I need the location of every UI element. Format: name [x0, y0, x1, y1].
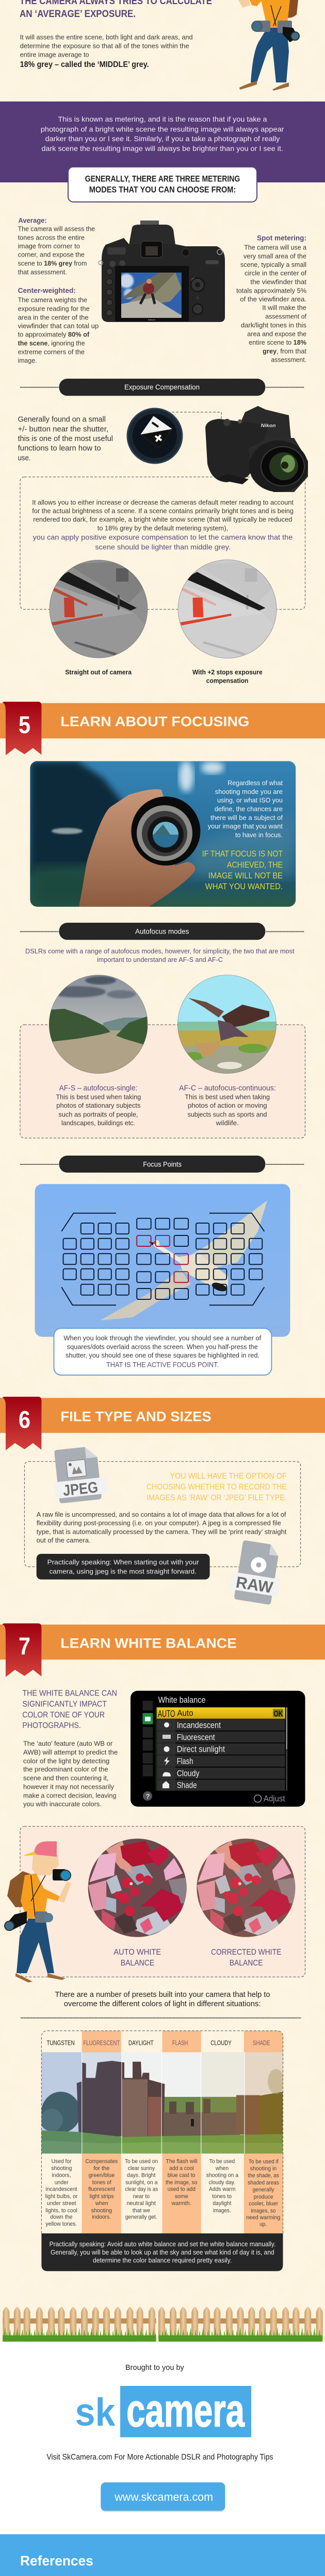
text: center-weighted metering: the scene, ignoring the [18, 340, 85, 347]
text: average metering: that assessment. [18, 268, 67, 276]
menu row: Auto [157, 1707, 285, 1719]
callout: practically speaking white balance: determine the color balance required pretty easily. [93, 2257, 232, 2264]
column: shade: need warming [246, 2214, 280, 2221]
section banner 6 [0, 1397, 325, 1450]
section banner 6: FILE TYPE AND SIZES [60, 1409, 212, 1424]
section banner 7 [0, 1623, 325, 1677]
callout: practically speaking white balance [41, 2233, 283, 2271]
text: presets intro: overcome the different colors of light in different situations: [64, 1999, 261, 2008]
text: spot metering: of the viewfinder area. [240, 295, 306, 303]
section pill: Exposure Compensation: Exposure Compensation [124, 383, 200, 391]
text: spot metering: assessment. [271, 356, 306, 364]
section pill: Autofocus modes: Autofocus modes [135, 927, 189, 935]
panel: metering band: dark scene the resulting image will always be brighter than you or I see it. [41, 144, 283, 152]
column: flash: The flash will [166, 2158, 197, 2164]
column: shade: To be used if [249, 2159, 279, 2165]
section pill: Autofocus modes [20, 923, 304, 940]
column: tungsten: Used for [52, 2158, 72, 2164]
column: cloudy: images. [213, 2208, 231, 2214]
text: auto white balance: make a correct decision, leaving [23, 1791, 116, 1799]
text: where the button is: functions to learn how to [18, 444, 101, 452]
column: tungsten: yellow tones. [45, 2221, 77, 2227]
column: shade: shooting in [250, 2166, 277, 2172]
text: autofocus intro [25, 947, 295, 963]
text: brought to you by: Brought to you by [125, 2364, 185, 2372]
text: spot metering [236, 234, 307, 364]
column: shade: up. [259, 2222, 267, 2228]
column: daylight: generally get. [125, 2214, 157, 2221]
panel: exposure compensation explanation: rendered too dark, for example, a bright white snow scene (that will typically be reduced [33, 516, 293, 523]
column: fluorescent: fluorescent [88, 2187, 115, 2193]
text: autofocus intro: important to understand are AF-S and AF-C [97, 956, 223, 963]
text: AF-S: This is best used when taking [56, 1093, 141, 1100]
panel: file types: CHOOSING WHETHER TO RECORD THE [147, 1483, 287, 1492]
image: camera back [99, 221, 225, 322]
column: tungsten: under street [47, 2200, 76, 2207]
column: flash: some [175, 2194, 188, 2200]
text: auto white balance: The ‘auto’ feature (auto WB or [23, 1740, 113, 1748]
menu rows: presets: Cloudy [177, 1768, 200, 1778]
image: camera back: Nikon [148, 318, 155, 321]
text: where the button is: this is one of the most useful [18, 434, 113, 443]
image: swan [100, 1200, 267, 1320]
table headers: FLUORESCENT [84, 2039, 120, 2046]
column: tungsten: under [55, 2179, 69, 2185]
text: center-weighted metering: viewfinder that can total up [18, 322, 99, 330]
text: center-weighted metering: image. [18, 357, 37, 364]
panel: metering band [0, 101, 325, 182]
text: center-weighted metering: Center-weighted: [18, 286, 76, 295]
captions for exposure photos [65, 668, 263, 685]
column: flash: blue cast to [168, 2172, 195, 2178]
text: spot metering: The camera will use a [244, 243, 307, 251]
image: photo straight out of camera [49, 560, 148, 659]
column: daylight: days. Bright [127, 2172, 155, 2178]
menu rows: presets: Flash [177, 1756, 193, 1766]
callout: practically speaking jpeg: Practically speaking: When starting out with your [47, 1558, 199, 1566]
panel: focusing photo with lens: using, or what ISO you [217, 796, 283, 804]
panel: focus points on swan photo [35, 1184, 290, 1375]
intro heading: AN ‘AVERAGE’ EXPOSURE. [20, 9, 136, 20]
section pill: Focus Points [20, 1156, 304, 1173]
table headers: DAYLIGHT [128, 2039, 154, 2046]
column: cloudy: Adds warm [209, 2187, 235, 2193]
column: flash: warmth. [171, 2200, 191, 2207]
panel: focusing photo with lens: define, the chances are [215, 805, 283, 812]
text: where the button is: Generally found on a small [18, 415, 106, 423]
image: camera white balance menu: Adjust [264, 1794, 285, 1804]
text: spot metering: very small area of the [243, 252, 306, 260]
column: tungsten: shooting [51, 2165, 72, 2172]
text: auto white balance: scene and then countering it, [23, 1774, 108, 1782]
column: daylight: clear sunny [128, 2165, 155, 2172]
panel: file types: out of the camera. [37, 1536, 91, 1544]
menu rows: presets: Shade [177, 1781, 197, 1790]
captions for exposure photos: compensation [206, 677, 248, 685]
column: fluorescent: when [95, 2200, 108, 2207]
text: AF-C: AF-C – autofocus-continuous: [179, 1084, 276, 1093]
panel: white balance presets table [40, 2031, 284, 2271]
menu sidebar icons [142, 1701, 153, 1801]
text: visit site: Visit SkCamera.com For More Actionable DSLR and Photography Tips [46, 2453, 273, 2462]
image: camera front: Nikon [261, 423, 276, 428]
image: corrected white balance leaves [197, 1838, 296, 1937]
column: flash: add a cool [169, 2165, 194, 2172]
column: shade: the shade, as [248, 2173, 279, 2179]
callout: practically speaking jpeg [37, 1554, 210, 1580]
table column backgrounds [82, 2031, 283, 2233]
menu row: Auto: AUTO [158, 1709, 175, 1719]
column: daylight: To be used on [125, 2158, 158, 2164]
column: cloudy: daylight [213, 2200, 231, 2207]
intro heading [20, 0, 212, 20]
text: spot metering: entire scene to 18% [249, 338, 306, 346]
menu row: Auto: Auto [177, 1708, 193, 1718]
text: spot metering: It will make the [262, 304, 306, 312]
column: daylight: sunlight, on a [125, 2179, 158, 2185]
intro text: entire image average to [20, 50, 89, 58]
panel: focusing photo with lens: IMAGE WILL NOT BE [208, 871, 283, 880]
captions: BALANCE [121, 1959, 154, 1968]
text: average metering: image from corner to [18, 242, 80, 250]
text: average metering: Average: [18, 216, 47, 225]
panel: focusing photo with lens: ACHIEVED, THE [227, 860, 283, 870]
column: cloudy: To be used [209, 2158, 235, 2164]
callout: active focus point: THAT IS THE ACTIVE FOCUS POINT. [106, 1360, 219, 1368]
column: fluorescent: indoors. [92, 2214, 111, 2221]
illustration: picket fence and grass [3, 2307, 323, 2342]
column: cloudy: cloudy day. [209, 2179, 235, 2185]
heading: white balance impact: SIGNIFICANTLY IMPACT [22, 1700, 107, 1709]
text: auto white balance: AWB) will attempt to predict the [23, 1748, 118, 1756]
text: where the button is [18, 415, 113, 462]
text: spot metering: Spot metering: [257, 234, 306, 242]
text: spot metering: grey, from that [263, 347, 306, 355]
panel: exposure compensation explanation: scene should be lighter than middle grey. [95, 543, 231, 551]
panel: focusing photo with lens: your image that you want [208, 822, 283, 830]
image: castle with colour tints [40, 2052, 284, 2154]
text: auto white balance [23, 1740, 118, 1808]
text: spot metering: circle in the center of [245, 269, 306, 277]
intro text [20, 33, 193, 69]
panel: metering band: photograph of a bright white scene the resulting image will always appear [41, 125, 284, 133]
text: spot metering: the viewfinder that [250, 278, 306, 285]
text: center-weighted metering: area in the center of the [18, 313, 89, 321]
column: fluorescent [86, 2158, 118, 2221]
text: auto white balance: you with inaccurate colors. [23, 1800, 102, 1808]
text: AF-S [56, 1084, 141, 1127]
text: auto white balance: however it may not necessarily [23, 1783, 114, 1791]
panel: metering band: darker than you or I see it. Similarly, if you a take a photograph of really [45, 134, 280, 143]
image: eagle and deer for AF-C [177, 975, 277, 1075]
text: where the button is: +/- button near the shutter, [18, 425, 108, 433]
text: spot metering: assessment of [265, 313, 306, 320]
button: website [101, 2482, 225, 2512]
menu rows: presets: Direct sunlight [177, 1744, 225, 1754]
column: fluorescent: tones of [92, 2179, 112, 2185]
text: spot metering: dark/light tones in this [241, 321, 307, 329]
panel: file types [24, 1462, 301, 1567]
text: spot metering: area and expose the [247, 330, 306, 337]
text: autofocus intro: DSLRs come with a range of autofocus modes, however, for simplicity, the two that are most [25, 947, 295, 955]
text: average metering [18, 216, 95, 276]
section banner 7: 7 [19, 1633, 30, 1660]
captions for exposure photos: Straight out of camera [65, 668, 132, 676]
captions [113, 1948, 281, 1968]
column: tungsten: indoors, [52, 2172, 71, 2178]
table headers: SHADE [253, 2039, 270, 2046]
image: camera white balance menu: White balance [158, 1695, 206, 1705]
callout: practically speaking white balance: Generally, you will be able to look up at the sky and see what kind of day it is, and [51, 2248, 274, 2256]
text: AF-S: AF-S – autofocus-single: [59, 1084, 137, 1093]
column: flash [166, 2158, 197, 2207]
text: center-weighted metering [18, 286, 99, 364]
panel: focusing photo with lens: shooting mode you are [215, 788, 283, 795]
text: AF-C: wildlife. [216, 1119, 239, 1127]
callout: active focus point: When you look through the viewfinder, you should see a number of [63, 1334, 262, 1342]
text: center-weighted metering: exposure reading for the [18, 304, 90, 312]
panel: exposure compensation explanation: to 18% grey by the default metering system), [98, 524, 228, 532]
text: center-weighted metering: extreme corners of the [18, 348, 85, 355]
callout: three metering modes: GENERALLY, THERE ARE THREE METERING [85, 174, 240, 183]
callout: three metering modes [68, 167, 257, 202]
column: tungsten: light bulbs, or [45, 2194, 78, 2200]
column: cloudy [206, 2158, 239, 2214]
icon: photographer with pink cap [5, 1841, 71, 1982]
icon: photographer top [238, 0, 299, 91]
text: AF-S: photos of stationary subjects [56, 1101, 141, 1109]
menu row: Auto: OK [273, 1709, 283, 1719]
icon: exposure compensation button [127, 409, 221, 463]
text: average metering: corner, and expose the [18, 251, 85, 259]
menu rows: presets [157, 1719, 285, 1791]
column: daylight: neutral light [127, 2200, 156, 2207]
heading: white balance impact: THE WHITE BALANCE CAN [22, 1689, 117, 1698]
panel: focusing photo with lens: IF THAT FOCUS IS NOT [202, 849, 283, 859]
button: website: www.skcamera.com [114, 2490, 213, 2503]
logo: sk camera: camera [126, 2385, 245, 2436]
panel: file types: type, that is automatically processed by the camera. They will be ‘print ready’ straight [37, 1528, 287, 1535]
column: fluorescent: for the [93, 2165, 109, 2172]
text: presets intro [55, 1990, 270, 2008]
callout: active focus point: shutter, you should see one of these squares be highlighted in red. [66, 1351, 259, 1359]
column: flash: the image, so [166, 2179, 197, 2185]
panel: focusing photo with lens: there will be a subject of [210, 814, 283, 821]
callout: active focus point: squares/dots overlaid across the screen. When you half-press the [67, 1343, 258, 1350]
callout: active focus point [54, 1328, 271, 1375]
column: daylight: that we [133, 2208, 150, 2214]
panel: references [0, 2534, 325, 2576]
text: auto white balance: the predominant color of the [23, 1766, 108, 1773]
icon: RAW file [228, 1539, 285, 1606]
panel: metering band: This is known as metering, and it is the reason that if you take a [58, 115, 267, 123]
column: shade: cooler, bluer [249, 2201, 279, 2207]
column: shade: produce [254, 2194, 273, 2200]
image: auto white balance leaves [88, 1838, 187, 1937]
text: auto white balance: color of the light by detecting [23, 1757, 109, 1765]
panel: autofocus modes [20, 975, 305, 1138]
column: cloudy: when [215, 2165, 229, 2172]
menu sidebar icons: ? [145, 1792, 150, 1800]
heading: white balance impact: COLOR TONE OF YOUR [22, 1710, 105, 1719]
section banner 7: LEARN WHITE BALANCE [60, 1635, 237, 1651]
table headers: CLOUDY [210, 2039, 232, 2046]
text: AF-S: such as portraits of people, [58, 1110, 138, 1118]
menu rows: presets: Fluorescent [177, 1732, 215, 1742]
column: daylight: near to [133, 2194, 150, 2200]
captions for exposure photos: With +2 stops exposure [192, 668, 263, 676]
column: cloudy: tones to [212, 2194, 232, 2200]
intro text: 18% grey – called the ‘MIDDLE’ grey. [20, 60, 149, 69]
text: center-weighted metering: to approximately 80% of [18, 331, 90, 338]
text: average metering: tones across the entire [18, 233, 85, 241]
text: AF-C [179, 1084, 276, 1127]
column: tungsten [45, 2158, 78, 2227]
text: spot metering: totals approximately 5% [236, 286, 306, 294]
image: landscape for AF-S [49, 975, 148, 1074]
section banner 5 [0, 702, 325, 755]
panel: file types: IMAGES AS ‘RAW’ OR ‘JPEG’ FILE TYPE. [147, 1494, 287, 1502]
text: spot metering: scene, typically a small [240, 261, 306, 268]
column: fluorescent: green/blue [89, 2172, 115, 2178]
text: presets intro: There are a number of presets built into your camera that help to [55, 1990, 270, 1999]
focus point grid [61, 1213, 264, 1305]
column: shade: shaded areas [248, 2180, 279, 2186]
image: photo with +2 stops [177, 560, 278, 659]
column: fluorescent: light strips [90, 2194, 114, 2200]
logo: sk camera [75, 2385, 251, 2437]
column: fluorescent: Compensates [86, 2158, 118, 2164]
heading: white balance impact [22, 1689, 117, 1730]
column: tungsten: down the [50, 2214, 73, 2221]
captions: CORRECTED WHITE [211, 1948, 281, 1957]
callout: practically speaking jpeg: camera, using jpeg is the most straight forward. [50, 1567, 197, 1575]
section banner 6: 6 [19, 1406, 30, 1433]
captions: BALANCE [230, 1959, 263, 1968]
panel: exposure compensation explanation [20, 477, 305, 609]
column: daylight [125, 2158, 158, 2221]
intro text: determine the exposure so that all of the tones within the [20, 42, 189, 49]
text: average metering: The camera will assess the [18, 225, 95, 232]
text: where the button is: use. [18, 453, 31, 462]
text: center-weighted metering: The camera weights the [18, 296, 87, 304]
panel: focusing photo with lens: WHAT YOU WANTED. [205, 882, 283, 891]
text: AF-C: subjects such as sports and [188, 1110, 267, 1118]
captions: AUTO WHITE [113, 1948, 161, 1957]
column: shade: generally [252, 2187, 274, 2193]
column: tungsten: incandescent [45, 2187, 77, 2193]
section banner 5: LEARN ABOUT FOCUSING [60, 714, 249, 729]
panel: file types: YOU WILL HAVE THE OPTION OF [170, 1472, 287, 1481]
panel: focusing photo with lens: to have in focus. [235, 831, 283, 839]
section banner 5: 5 [19, 711, 30, 738]
panel: exposure compensation explanation: It allows you to either increase or decrease the cameras default meter reading to account [32, 498, 294, 506]
panel: file types: A raw file is uncompressed, and so contains a lot of image data that allows for a lot of [37, 1511, 286, 1518]
logo: sk camera: sk [75, 2391, 116, 2434]
icon: RAW file: RAW [235, 1573, 274, 1597]
table headers: TUNGSTEN [46, 2039, 75, 2046]
icon: JPEG file [51, 1445, 108, 1504]
section pill: Exposure Compensation [20, 379, 304, 396]
callout: practically speaking white balance: Practically speaking: Avoid auto white balance and set the white balance manually. [50, 2240, 275, 2248]
image: camera white balance menu [131, 1691, 305, 1807]
panel: references: References [20, 2553, 93, 2568]
column: shade [246, 2159, 280, 2228]
table headers: FLASH [172, 2039, 188, 2046]
column: tungsten: lights, to cool [45, 2208, 77, 2214]
column: fluorescent: shooting [91, 2208, 112, 2214]
text: AF-C: This is best used when taking [185, 1093, 270, 1100]
column: shade: images, so [251, 2208, 275, 2214]
callout: three metering modes: MODES THAT YOU CAN CHOOSE FROM: [89, 185, 236, 194]
text: average metering: scene to 18% grey from [18, 260, 87, 267]
column: flash: used to add [168, 2187, 196, 2193]
panel: exposure compensation explanation: you can apply positive exposure compensation to let the camera know that the [33, 533, 293, 541]
icon: JPEG file: JPEG [62, 1479, 99, 1499]
panel: file types: flexibility during post-processing (i.e. on your computer). A jpeg is a compressed file [37, 1519, 281, 1527]
panel: auto vs corrected white balance [20, 1826, 305, 1977]
heading: white balance impact: PHOTOGRAPHS. [22, 1721, 81, 1730]
section pill: Focus Points: Focus Points [143, 1160, 182, 1168]
panel: focusing photo with lens: Regardless of what [228, 779, 283, 787]
text: AF-S: landscapes, buildings etc. [61, 1119, 135, 1127]
table headers [46, 2039, 270, 2046]
column: daylight: clear day is as [125, 2187, 158, 2193]
image: camera front [205, 406, 308, 492]
intro text: It will asses the entire scene, both light and dark areas, and [20, 33, 193, 41]
text: AF-C: photos of action or moving [188, 1101, 267, 1109]
panel: exposure compensation explanation: for the actual brightness of a scene. If a scene contains primarily bright tones and is being [32, 507, 294, 515]
panel: focusing photo with lens [30, 761, 296, 907]
menu rows: presets: Incandescent [177, 1720, 221, 1730]
column: cloudy: shooting on a [206, 2172, 239, 2178]
